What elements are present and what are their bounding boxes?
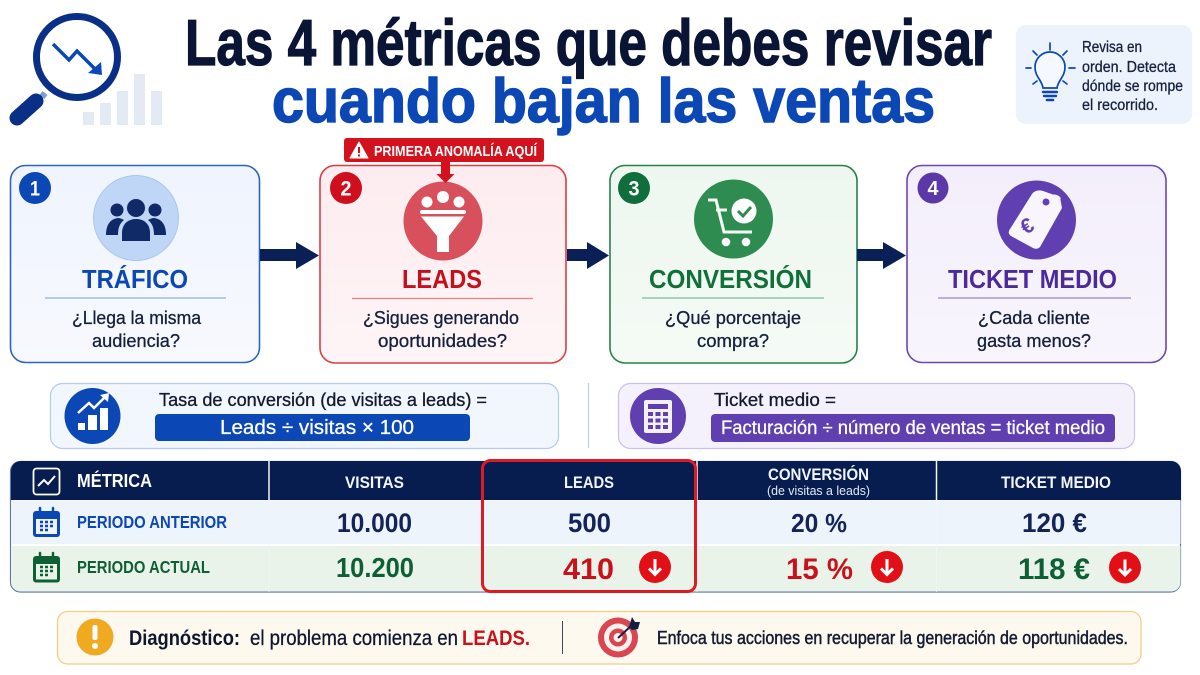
row: periodo anterior: 20 % (791, 508, 847, 538)
icon: warning (350, 142, 368, 158)
badge 3 (618, 172, 650, 204)
header row: CONVERSIÓN (768, 465, 869, 484)
icon: price tag: € (1016, 213, 1038, 239)
arrow: down to leads (436, 162, 454, 183)
question (363, 308, 519, 351)
icon: funnel (404, 182, 482, 260)
row: periodo actual: 10.200 (336, 552, 414, 583)
panel: tráfico (10, 166, 260, 362)
callout: tip box: orden. Detecta (1082, 59, 1176, 76)
question: ¿Sigues generando (363, 308, 519, 328)
diagnosis text (129, 627, 530, 650)
callout: tip box: Revisa en (1082, 39, 1142, 56)
icon: audience (94, 176, 178, 260)
header row: VISITAS (345, 473, 404, 492)
question: ¿Cada cliente (978, 308, 1090, 328)
row: periodo anterior: 10.000 (337, 508, 412, 538)
header row (34, 465, 1111, 498)
icon: down arrow leads (639, 551, 671, 583)
badge 1 (19, 172, 51, 204)
row: periodo anterior (33, 508, 1087, 538)
title: Las 4 métricas que debes revisar (185, 6, 992, 79)
icon: calculator (630, 388, 686, 444)
header row: LEADS (564, 474, 614, 492)
callout: tip box (1016, 25, 1192, 124)
formula pill (155, 414, 470, 441)
badge 4 (918, 172, 948, 204)
row: periodo anterior: 500 (568, 508, 611, 538)
panel: fórmula conversión (50, 384, 558, 448)
arrow: 2 to 3 (567, 242, 609, 269)
header row: MÉTRICA (77, 470, 152, 491)
badge 3: 3 (628, 178, 640, 200)
panel: ticket medio (907, 166, 1166, 362)
panel: fórmula ticket medio: Ticket medio = (714, 390, 836, 410)
badge 1: 1 (30, 178, 40, 200)
question: ¿Qué porcentaje (665, 308, 801, 328)
row: periodo actual: 15 % (786, 553, 853, 586)
question: oportunidades? (378, 331, 507, 351)
diagnosis text: LEADS. (462, 627, 530, 650)
question (72, 308, 202, 351)
panel: leads (320, 166, 566, 363)
heading: TRÁFICO (82, 265, 188, 294)
icon: growth chart (64, 388, 120, 444)
table: metrics (10, 460, 1181, 592)
title: cuando bajan las ventas (272, 67, 935, 136)
callout: tip box: el recorrido. (1082, 97, 1158, 114)
icon: chart (34, 468, 60, 494)
panel: diagnóstico (58, 612, 1141, 664)
panel: conversión (610, 166, 857, 363)
arrow: 3 to 4 (857, 242, 906, 269)
row: periodo actual (33, 552, 1090, 586)
question: compra? (697, 331, 769, 351)
question (977, 308, 1091, 351)
callout: tip box: dónde se rompe (1082, 78, 1183, 95)
icon: calendar blue (33, 508, 60, 537)
callout: primera anomalía (344, 138, 544, 183)
highlight: leads column (482, 460, 696, 592)
icon: magnifier over declining chart (17, 16, 162, 125)
question (665, 308, 801, 351)
question: ¿Llega la misma (72, 308, 202, 328)
row: periodo actual: 410 (563, 553, 614, 586)
formula pill: Leads ÷ visitas × 100 (220, 417, 414, 439)
heading: TICKET MEDIO (948, 266, 1117, 294)
row: periodo actual: 118 € (1018, 553, 1090, 586)
icon: down arrow ticket (1109, 552, 1141, 584)
panel: fórmula conversión: Tasa de conversión (de visitas a leads) = (159, 390, 487, 410)
icon: calendar green (33, 553, 60, 582)
formula pill: Facturación ÷ número de ventas = ticket medio (721, 417, 1105, 439)
heading: CONVERSIÓN (649, 264, 812, 294)
panel: diagnóstico: Enfoca tus acciones en recuperar la generación de oportunidades. (657, 628, 1128, 648)
row: periodo anterior: PERIODO ANTERIOR (77, 512, 227, 532)
diagnosis text: el problema comienza en (250, 627, 458, 650)
badge 2: 2 (340, 178, 352, 200)
icon: warning circle (76, 618, 114, 656)
title (185, 6, 992, 136)
question: audiencia? (92, 331, 180, 351)
row: periodo anterior: 120 € (1022, 508, 1087, 538)
row: periodo actual: PERIODO ACTUAL (77, 557, 210, 577)
arrow: 1 to 2 (260, 242, 319, 269)
badge 4: 4 (928, 178, 939, 200)
callout: primera anomalía: PRIMERA ANOMALÍA AQUÍ (374, 143, 538, 160)
question: gasta menos? (977, 331, 1091, 351)
header row: (de visitas a leads) (767, 484, 870, 498)
icon: light bulb (1026, 43, 1075, 100)
header row: TICKET MEDIO (1001, 473, 1111, 492)
icon: price tag (997, 180, 1076, 260)
heading: LEADS (402, 266, 482, 294)
panel: fórmula ticket medio (618, 384, 1134, 448)
icon: target (598, 617, 640, 658)
diagnosis text: Diagnóstico: (129, 627, 240, 650)
icon: down arrow conversión (871, 551, 903, 583)
badge 2 (330, 172, 362, 204)
icon: cart (694, 180, 773, 258)
